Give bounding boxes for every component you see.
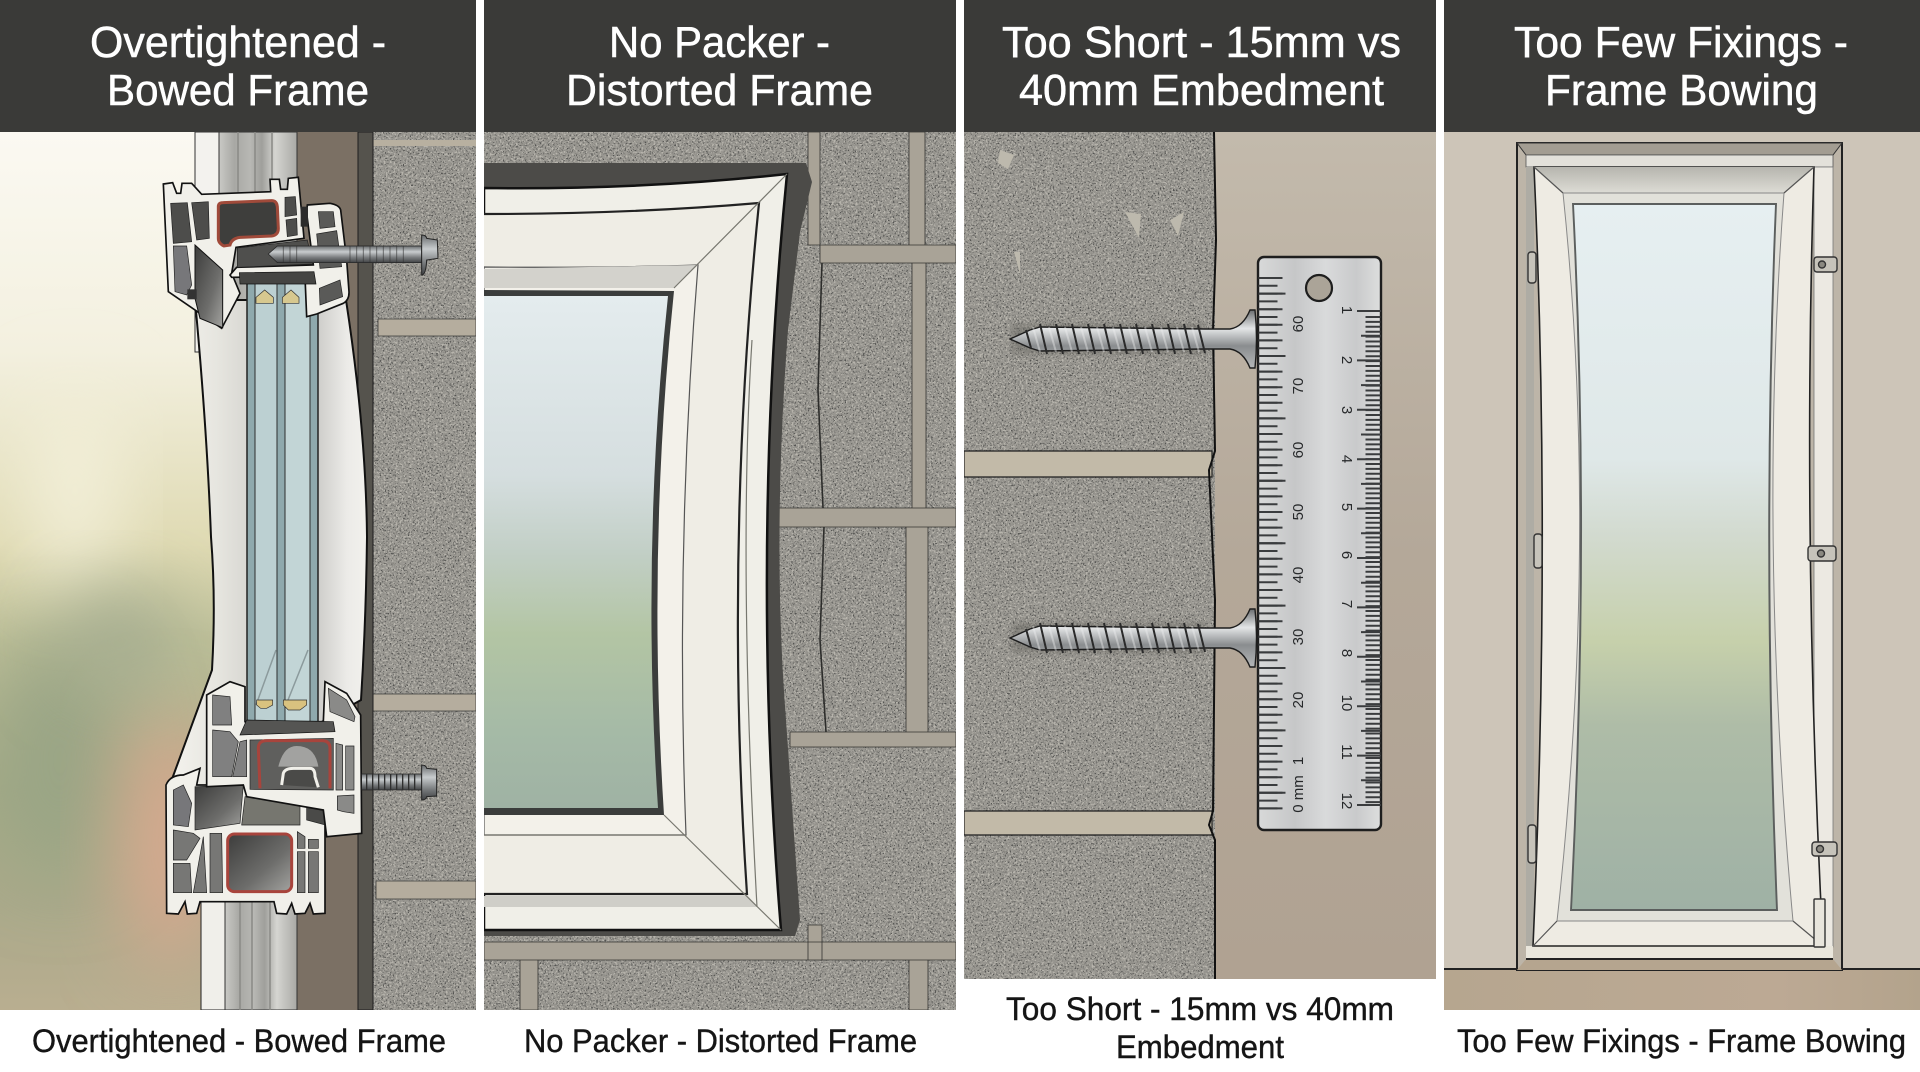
inner bead bbox=[1557, 193, 1793, 921]
steel ruler: 10 bbox=[1338, 695, 1355, 711]
caption: overtightened: Overtightened - Bowed Frame bbox=[32, 1023, 446, 1059]
bottom screw bbox=[1010, 609, 1256, 667]
blurred garden background bbox=[0, 132, 213, 1010]
mitre joints bbox=[1533, 167, 1823, 946]
heading bar: overtightened: Overtightened - bbox=[90, 18, 386, 67]
steel ruler: 8 bbox=[1338, 649, 1355, 657]
heading bar: overtightened bbox=[0, 0, 476, 132]
blurred glass bbox=[484, 296, 668, 808]
steel ruler: 30 bbox=[1290, 629, 1307, 645]
panel: no packer distorted frame bbox=[484, 0, 956, 1059]
mitre joints bbox=[484, 174, 787, 930]
concrete block wall bbox=[373, 132, 476, 1010]
top bevel of bead bbox=[484, 265, 698, 288]
floor bbox=[1444, 969, 1920, 1010]
top bevel bbox=[1534, 167, 1814, 193]
plaster background bbox=[1214, 132, 1436, 979]
glass seal bbox=[1570, 203, 1778, 911]
caption: too few fixings: Too Few Fixings - Frame Bowing bbox=[1457, 1023, 1906, 1059]
bottom profile section bbox=[166, 682, 362, 914]
glass seal bbox=[484, 290, 674, 815]
sash bbox=[484, 203, 759, 894]
illustration: bowed frame cross-section bbox=[0, 132, 476, 1010]
inner bead bbox=[484, 265, 698, 835]
steel ruler: 5 bbox=[1338, 503, 1355, 511]
steel ruler: 50 bbox=[1290, 504, 1307, 520]
double glazing bbox=[247, 282, 318, 722]
steel ruler: 11 bbox=[1338, 744, 1355, 760]
caption: too short: Embedment bbox=[1116, 1029, 1284, 1065]
heading bar: too few fixings: Frame Bowing bbox=[1545, 66, 1818, 115]
caption: no packer: No Packer - Distorted Frame bbox=[524, 1023, 917, 1059]
steel ruler: 0 mm bbox=[1290, 775, 1307, 813]
top profile section bbox=[163, 177, 349, 328]
illustration: tall window with bowed frame bbox=[1444, 132, 1920, 1010]
heading bar: no packer bbox=[484, 0, 956, 132]
concrete block with mortar joints bbox=[964, 132, 1216, 979]
reveal bbox=[1517, 143, 1842, 970]
steel ruler: 3 bbox=[1338, 406, 1355, 414]
steel ruler: 40 bbox=[1290, 567, 1307, 583]
caption: too short: Too Short - 15mm vs 40mm bbox=[1006, 991, 1394, 1027]
steel ruler: 60 bbox=[1290, 316, 1307, 332]
steel ruler bbox=[1258, 257, 1381, 830]
heading bar: too short bbox=[964, 0, 1436, 132]
steel ruler: 70 bbox=[1290, 378, 1307, 394]
illustration: distorted window corner bbox=[484, 132, 956, 1010]
bottom bolt bbox=[362, 765, 437, 800]
steel ruler: 1 bbox=[1290, 757, 1307, 765]
steel ruler: 4 bbox=[1338, 455, 1355, 463]
panel: too short embedment bbox=[964, 0, 1436, 1065]
steel ruler: 2 bbox=[1338, 356, 1355, 364]
bowed sash bbox=[1533, 167, 1823, 946]
fixing lugs bbox=[1528, 252, 1837, 947]
steel ruler: 6 bbox=[1338, 551, 1355, 559]
steel ruler: 60 bbox=[1290, 442, 1307, 458]
window reveal bbox=[297, 132, 373, 1010]
frame jamb above and below bbox=[195, 132, 297, 1010]
heading bar: too few fixings: Too Few Fixings - bbox=[1514, 18, 1848, 67]
heading bar: too short: Too Short - 15mm vs bbox=[1002, 18, 1401, 67]
steel ruler: 12 bbox=[1338, 793, 1355, 809]
blurred glass bbox=[1572, 205, 1776, 909]
heading bar: too short: 40mm Embedment bbox=[1019, 66, 1384, 115]
top bolt bbox=[268, 235, 438, 275]
heading bar: no packer: No Packer - bbox=[609, 18, 830, 67]
concrete block wall and mortar bbox=[484, 132, 956, 1010]
panel: too few fixings bbox=[1444, 0, 1920, 1059]
distorted outer frame bbox=[484, 174, 787, 930]
illustration: short screws and ruler bbox=[964, 132, 1436, 979]
wall bbox=[1444, 132, 1920, 1010]
panel: overtightened bowed frame bbox=[0, 0, 476, 1059]
caption: too short bbox=[1006, 991, 1394, 1065]
heading bar: no packer: Distorted Frame bbox=[566, 66, 873, 115]
dark gap around frame bbox=[484, 163, 812, 936]
top screw bbox=[1010, 310, 1256, 368]
bowed frame body bbox=[168, 300, 367, 790]
steel ruler: 20 bbox=[1290, 692, 1307, 708]
steel ruler: 1 bbox=[1338, 306, 1355, 314]
steel ruler: 7 bbox=[1338, 600, 1355, 608]
heading bar: overtightened: Bowed Frame bbox=[107, 66, 369, 115]
heading bar: too few fixings bbox=[1444, 0, 1920, 132]
bottom bevel of sash bbox=[484, 896, 758, 907]
